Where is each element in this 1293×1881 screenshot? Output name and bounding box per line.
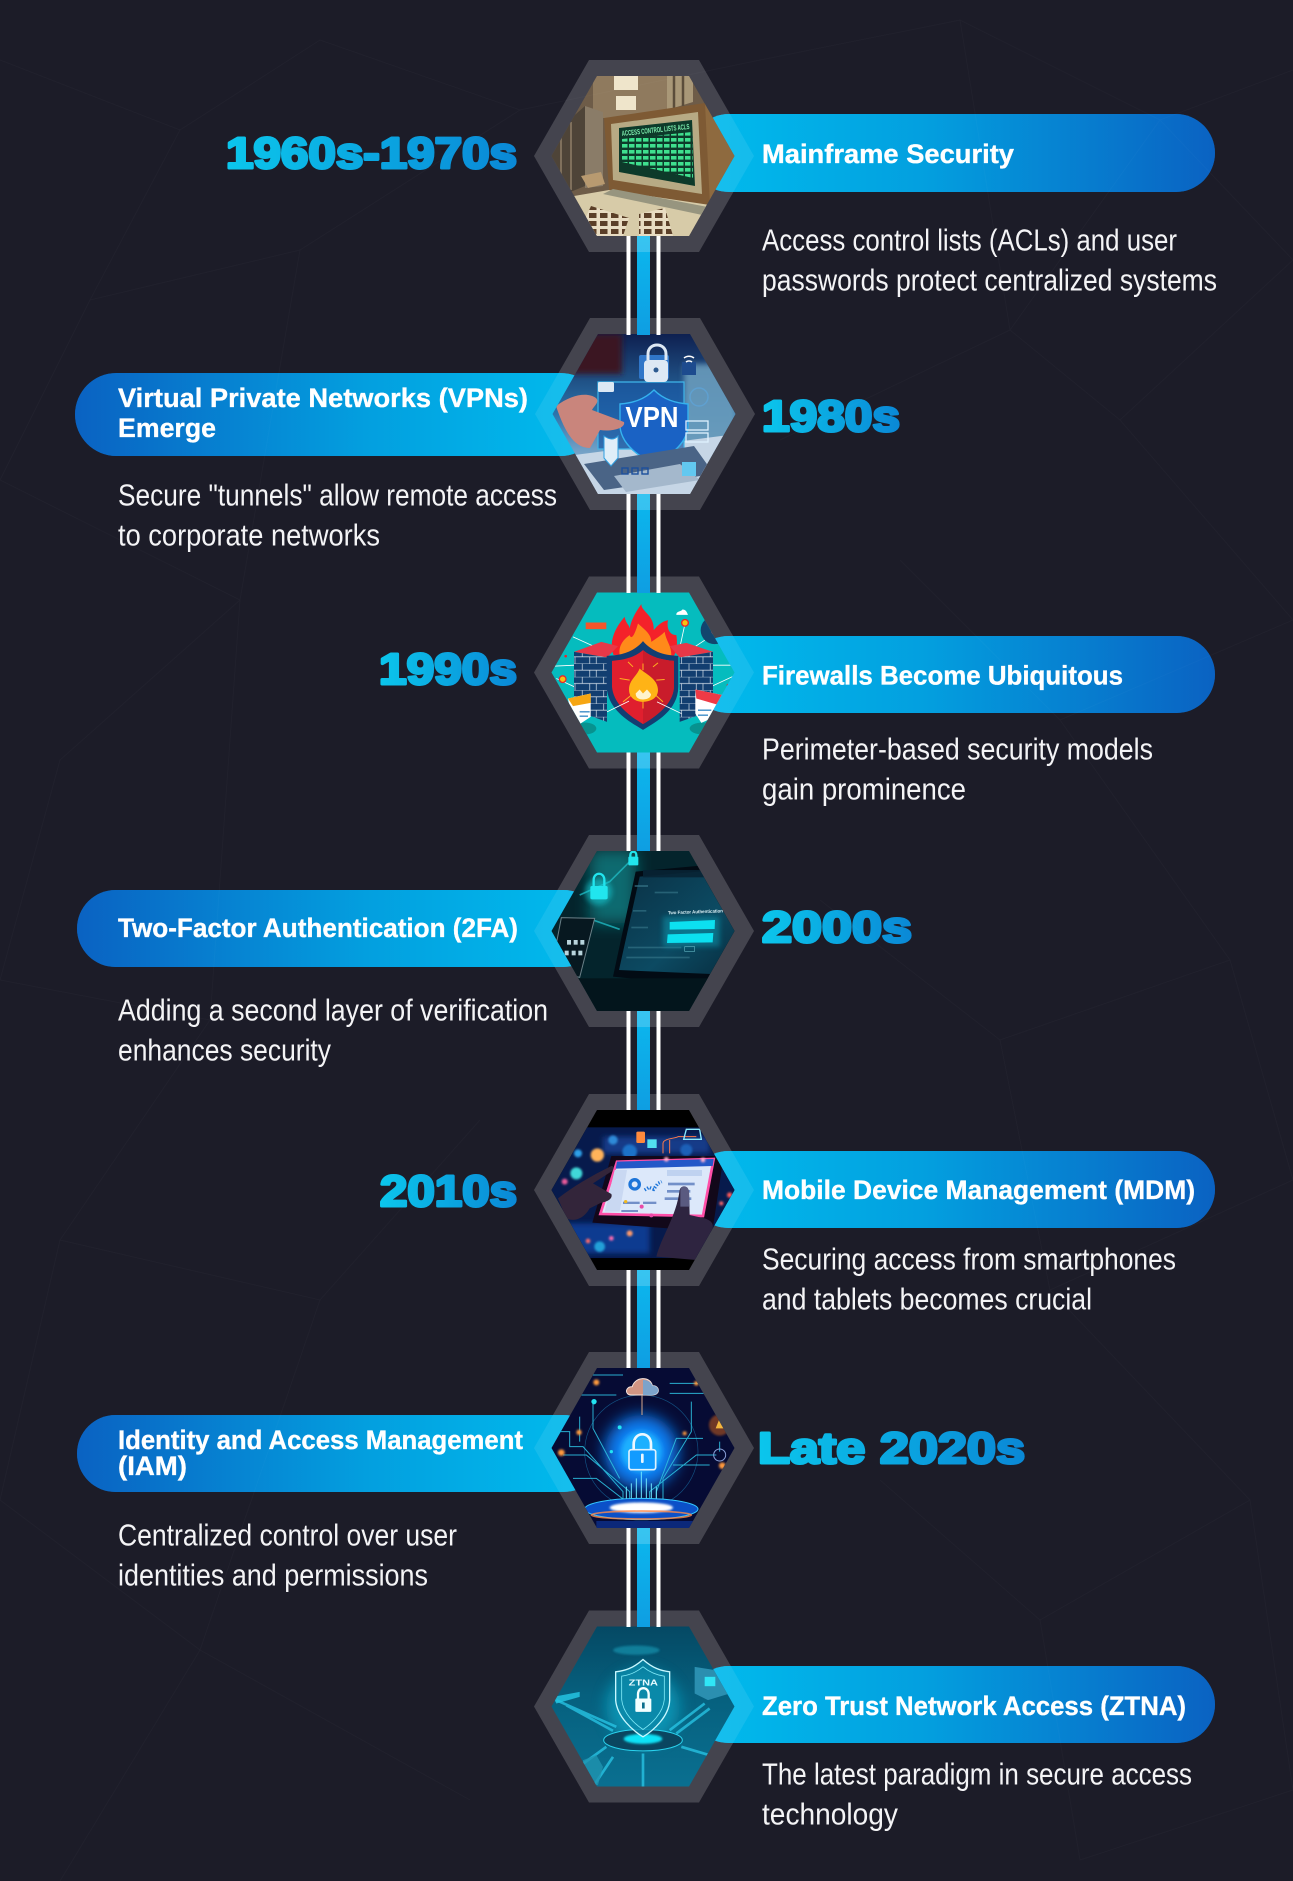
description: gain prominence [762, 772, 966, 806]
banner: ZTNA [690, 1666, 1215, 1743]
hexagon frame [534, 835, 754, 1027]
banner: 2FA [77, 890, 602, 967]
title: Emerge [118, 413, 216, 443]
image: VPN laptop and hand [552, 334, 736, 494]
milestone 5: Mobile Device Management [380, 1090, 1215, 1316]
description: and tablets becomes crucial [762, 1282, 1092, 1316]
year: 2010s: 2010s [380, 1167, 517, 1216]
image: laptop with 2FA form [552, 851, 734, 1011]
description: passwords protect centralized systems [762, 262, 1217, 298]
description [118, 478, 557, 552]
description [118, 992, 548, 1068]
image: ZTNA shield over network [552, 1626, 734, 1786]
banner: VPN [75, 373, 602, 456]
title: Firewalls Become Ubiquitous [762, 660, 1123, 690]
description: identities and permissions [118, 1558, 428, 1592]
title [118, 1425, 523, 1481]
description: The latest paradigm in secure access [762, 1756, 1192, 1792]
image: mainframe terminal: ACCESS CONTROL LISTS ACLS [621, 122, 690, 138]
milestone 1: Mainframe Security [226, 60, 1217, 298]
banner: mainframe [690, 114, 1215, 192]
title: Two-Factor Authentication (2FA) [118, 913, 518, 943]
milestone 4: Two-Factor Authentication [77, 830, 912, 1068]
title: Virtual Private Networks (VPNs) [118, 383, 528, 413]
connector 6 to 7 [626, 1528, 660, 1627]
image: tablet dashboard [552, 1110, 734, 1270]
connector 3 to 4 [626, 752, 660, 851]
description: Adding a second layer of verification [118, 992, 548, 1028]
description: Centralized control over user [118, 1518, 457, 1552]
description [762, 222, 1217, 298]
hexagon frame [534, 1610, 754, 1802]
title: Mainframe Security [762, 139, 1014, 169]
image: laptop with 2FA form: Two Factor Authentication [668, 908, 723, 915]
image: padlock with circuit board [552, 1368, 734, 1528]
image: VPN laptop and hand: VPN [626, 402, 678, 434]
description: Access control lists (ACLs) and user [762, 222, 1177, 258]
image: brick firewall with shield [552, 592, 734, 752]
description: to corporate networks [118, 518, 380, 552]
title: (IAM) [118, 1451, 187, 1481]
banner: IAM [77, 1415, 602, 1492]
hexagon frame [535, 318, 755, 510]
year: 1980s: 1980s [762, 392, 900, 441]
description [762, 1756, 1192, 1832]
image: mainframe terminal [551, 76, 735, 236]
milestone 6: Identity and Access Management [77, 1345, 1025, 1592]
connector 1 to 2 [626, 236, 660, 335]
banner: firewalls [690, 636, 1215, 713]
connector 2 to 3 [626, 494, 660, 593]
year: 2000s: 2000s [762, 903, 912, 952]
description: Secure "tunnels" allow remote access [118, 478, 557, 512]
milestone 7: Zero Trust Network Access [530, 1600, 1215, 1832]
year: Late 2020s: Late 2020s [758, 1424, 1025, 1473]
title: Identity and Access Management [118, 1425, 523, 1455]
description: technology [762, 1796, 898, 1832]
hexagon frame [534, 576, 754, 768]
hexagon frame [534, 60, 754, 252]
milestone 3: Firewalls [379, 570, 1215, 806]
hexagon frame [534, 1352, 754, 1544]
description: enhances security [118, 1032, 331, 1068]
banner: MDM [690, 1151, 1215, 1228]
year: 1960s-1970s: 1960s-1970s [226, 129, 517, 178]
title: Mobile Device Management (MDM) [762, 1175, 1195, 1205]
description: Securing access from smartphones [762, 1242, 1176, 1276]
description [762, 1242, 1176, 1316]
year: 1990s: 1990s [379, 645, 517, 694]
connector 4 to 5 [626, 1011, 660, 1110]
hexagon frame [534, 1094, 754, 1286]
title: Zero Trust Network Access (ZTNA) [762, 1691, 1186, 1721]
image: ZTNA shield over network: ZTNA [629, 1678, 659, 1688]
milestone 2: VPNs [75, 318, 900, 552]
description [118, 1518, 457, 1592]
description [762, 732, 1153, 806]
title [118, 383, 528, 443]
description: Perimeter-based security models [762, 732, 1153, 766]
connector 5 to 6 [626, 1270, 660, 1368]
